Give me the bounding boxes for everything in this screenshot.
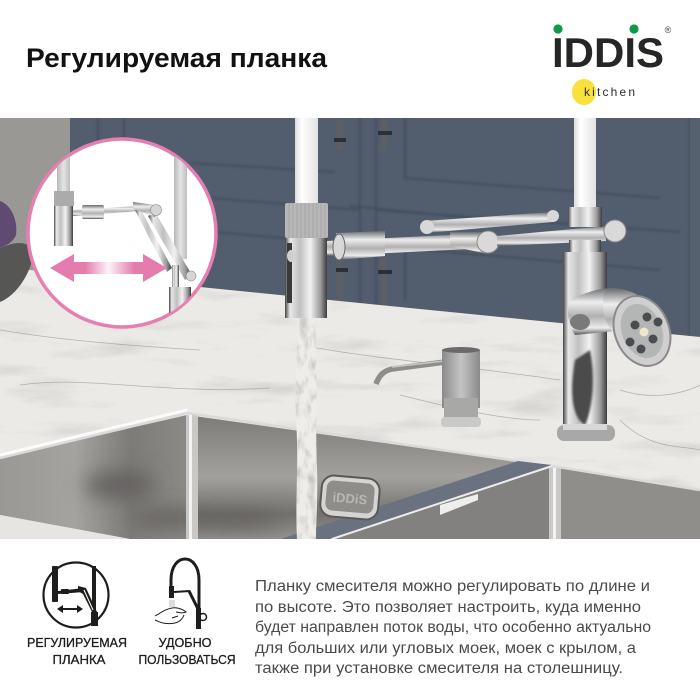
logo: IDDIS kitchen [552, 24, 672, 105]
inset faucet [54, 156, 196, 314]
icon: adjustable bar [44, 562, 108, 628]
icon label: easy to use: УДОБНО [158, 635, 212, 650]
soap dispenser [376, 347, 481, 427]
description text: также при установке смесителя на столешницу. [255, 660, 623, 677]
description text [255, 578, 651, 677]
drain plate with logo: iDDiS [332, 490, 368, 508]
inset circle: adjustable bar detail [28, 139, 216, 327]
logo: IDDIS kitchen: kitchen [584, 85, 635, 99]
icon label: adjustable bar: ПЛАНКА [52, 652, 106, 667]
description text: будет направлен поток воды, что особенно актуально [255, 619, 651, 636]
photo: kitchen sink scene [0, 118, 700, 539]
main faucet body [557, 118, 625, 441]
icon label: adjustable bar [27, 635, 127, 667]
icon label: easy to use [138, 635, 236, 667]
decor: eggplant on stone bowl [0, 201, 33, 302]
logo: IDDIS kitchen: IDDIS [552, 29, 664, 76]
description text: для больших или угловых моек, моек с крылом, а [255, 640, 636, 657]
main faucet pull-out head [285, 118, 328, 318]
icon label: easy to use: ПОЛЬЗОВАТЬСЯ [138, 652, 236, 667]
sink bridge chrome strip [280, 461, 552, 539]
icon: easy to use [155, 559, 206, 629]
logo: IDDIS kitchen: ® [665, 25, 672, 35]
water stream [295, 318, 317, 539]
drain plate with logo [318, 473, 382, 522]
main faucet adjustable arm [327, 210, 626, 260]
icon label: adjustable bar: РЕГУЛИРУЕМАЯ [27, 635, 127, 650]
countertop [0, 267, 700, 539]
main faucet side wheel handle [603, 290, 672, 367]
wall and cabinets background [0, 118, 700, 348]
sink: left bowl [0, 410, 700, 539]
inset double arrow [50, 254, 167, 282]
title: Регулируемая планка [26, 43, 328, 73]
description text: по высоте. Это позволяет настроить, куда именно [255, 599, 641, 616]
description text: Планку смесителя можно регулировать по длине и [255, 578, 650, 595]
